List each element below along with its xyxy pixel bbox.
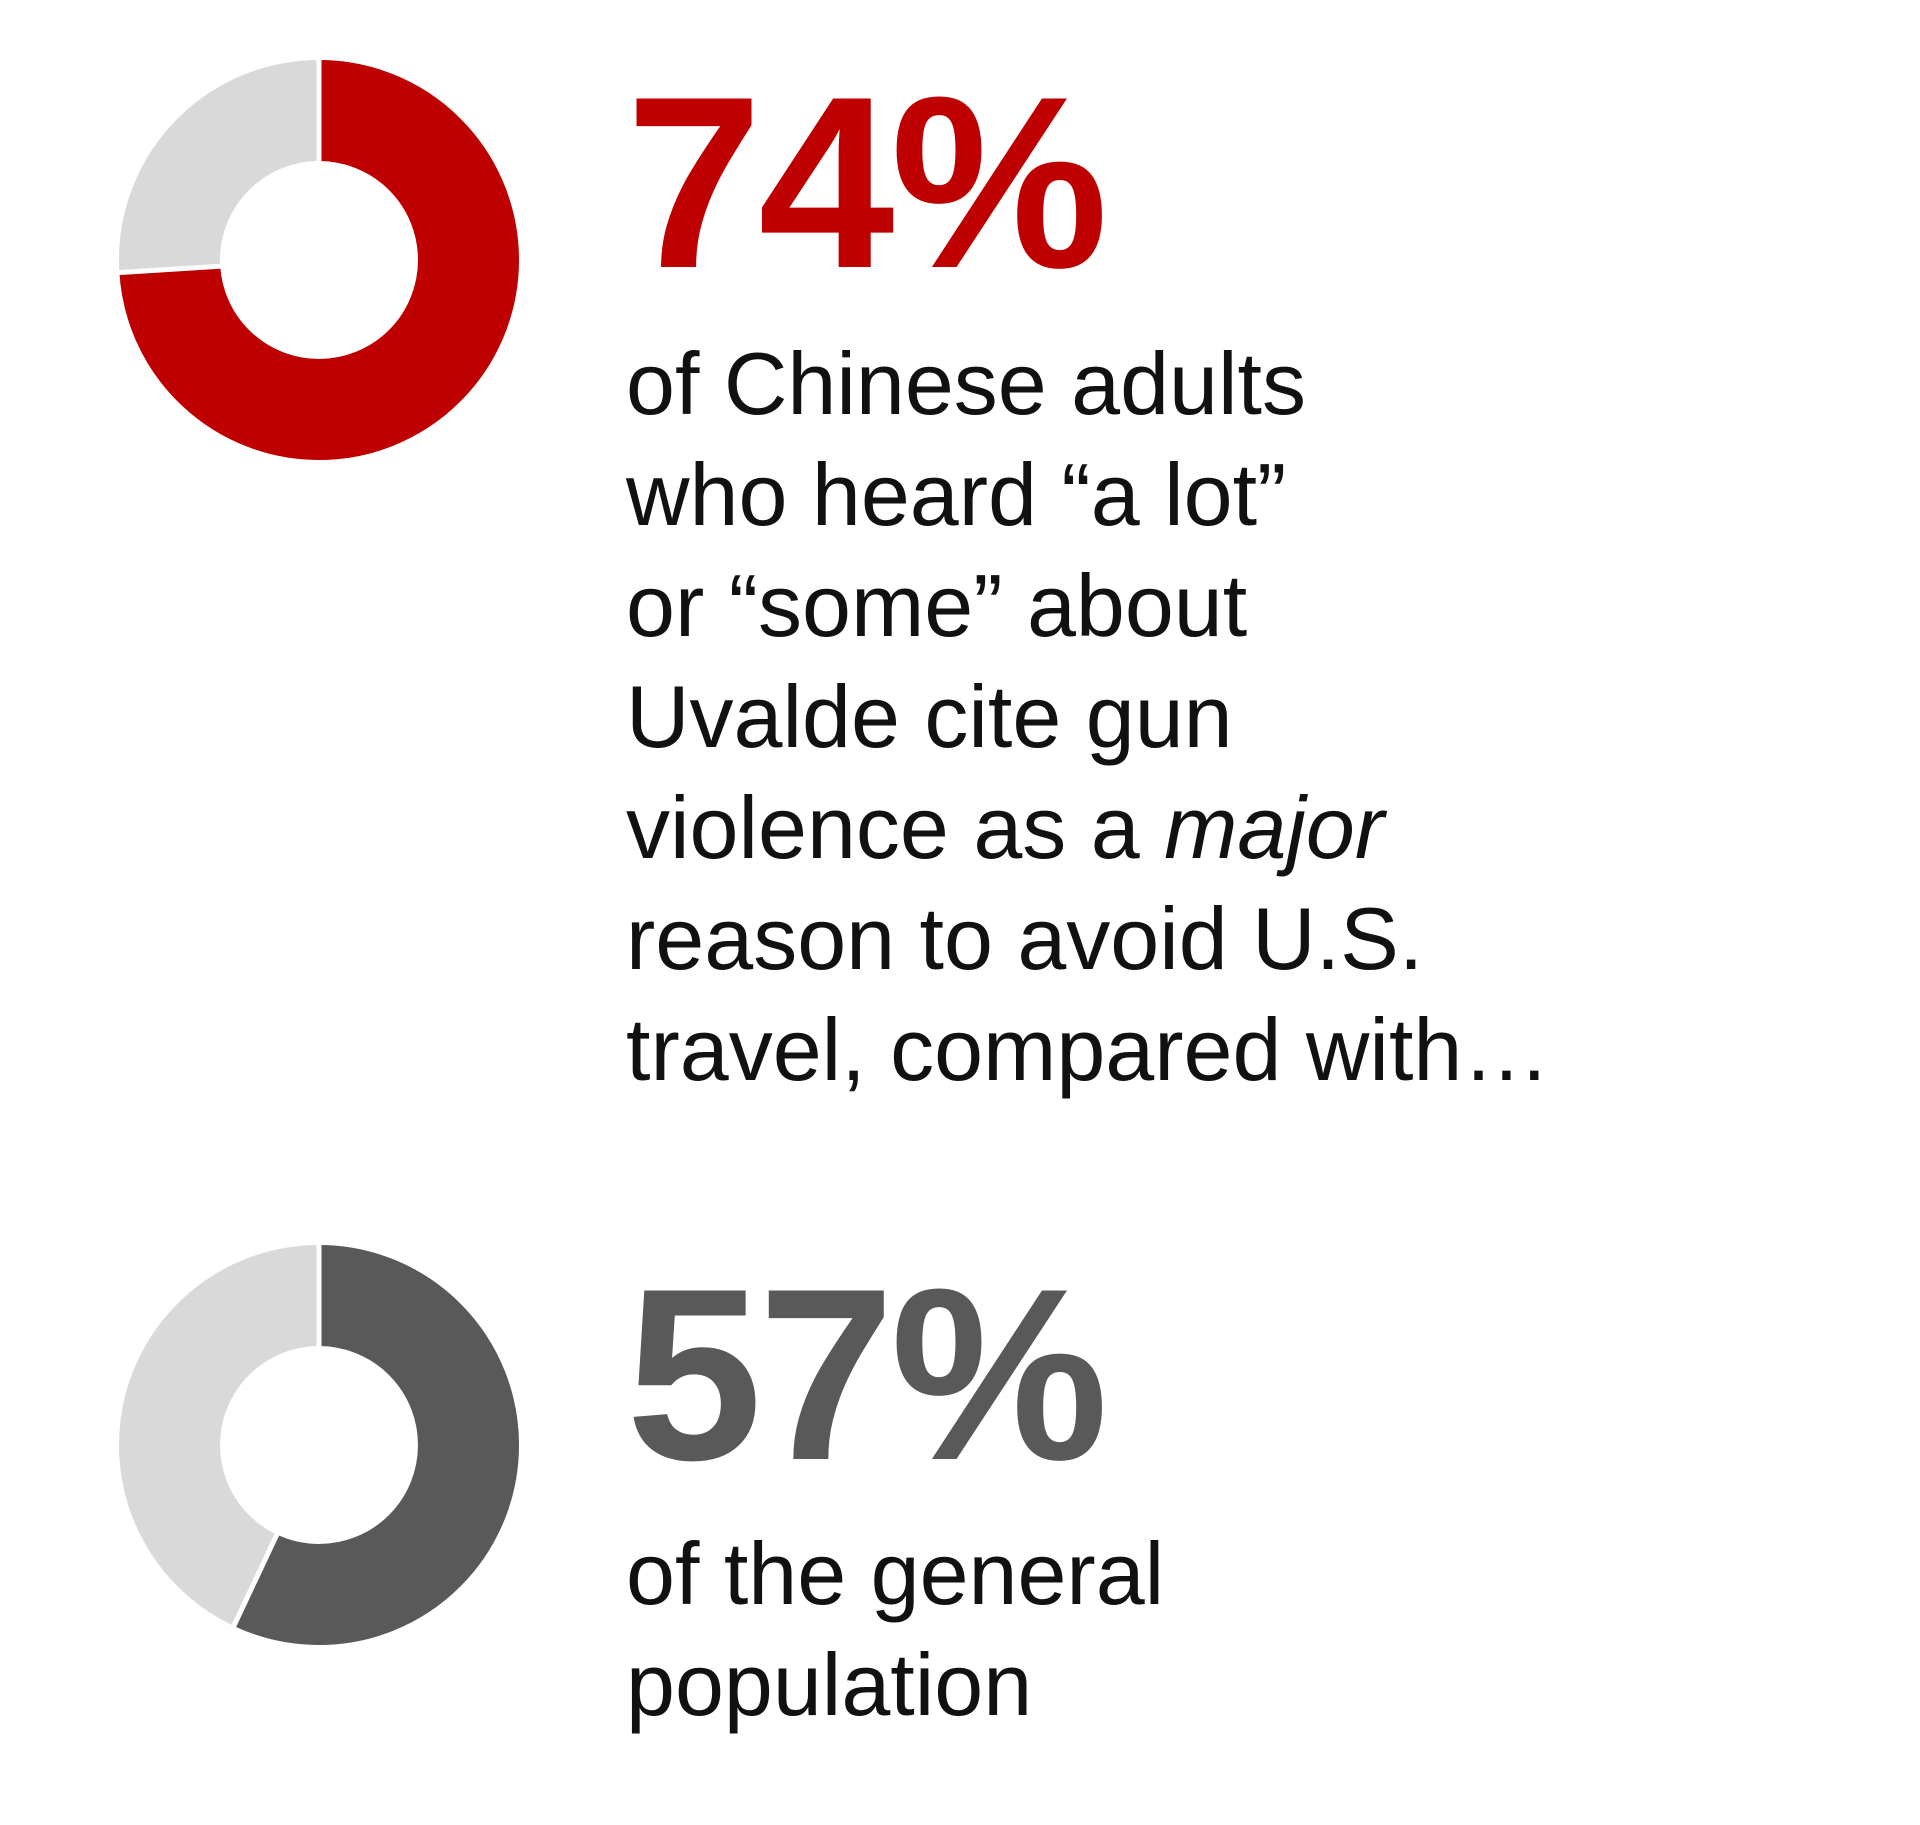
donut chart: 57% xyxy=(119,1245,519,1645)
text block: Chinese adults description: of Chinese adults xyxy=(626,334,1306,433)
text block: general population: of the general xyxy=(626,1524,1164,1623)
text block: Chinese adults description: violence as a major xyxy=(626,778,1384,877)
text block: Chinese adults description: who heard “a lot” xyxy=(626,445,1286,544)
text block: general population: population xyxy=(626,1635,1032,1734)
text block: Chinese adults description xyxy=(626,334,1550,1099)
donut chart: 74% xyxy=(119,60,519,460)
stat: 74%: 74% xyxy=(626,45,1104,319)
text block: Chinese adults description: travel, compared with… xyxy=(626,1000,1550,1099)
text block: general population xyxy=(626,1524,1164,1734)
text block: Chinese adults description: or “some” about xyxy=(626,556,1247,655)
stat: 57%: 57% xyxy=(626,1237,1104,1511)
text block: Chinese adults description: reason to avoid U.S. xyxy=(626,889,1423,988)
text block: Chinese adults description: Uvalde cite gun xyxy=(626,667,1233,766)
